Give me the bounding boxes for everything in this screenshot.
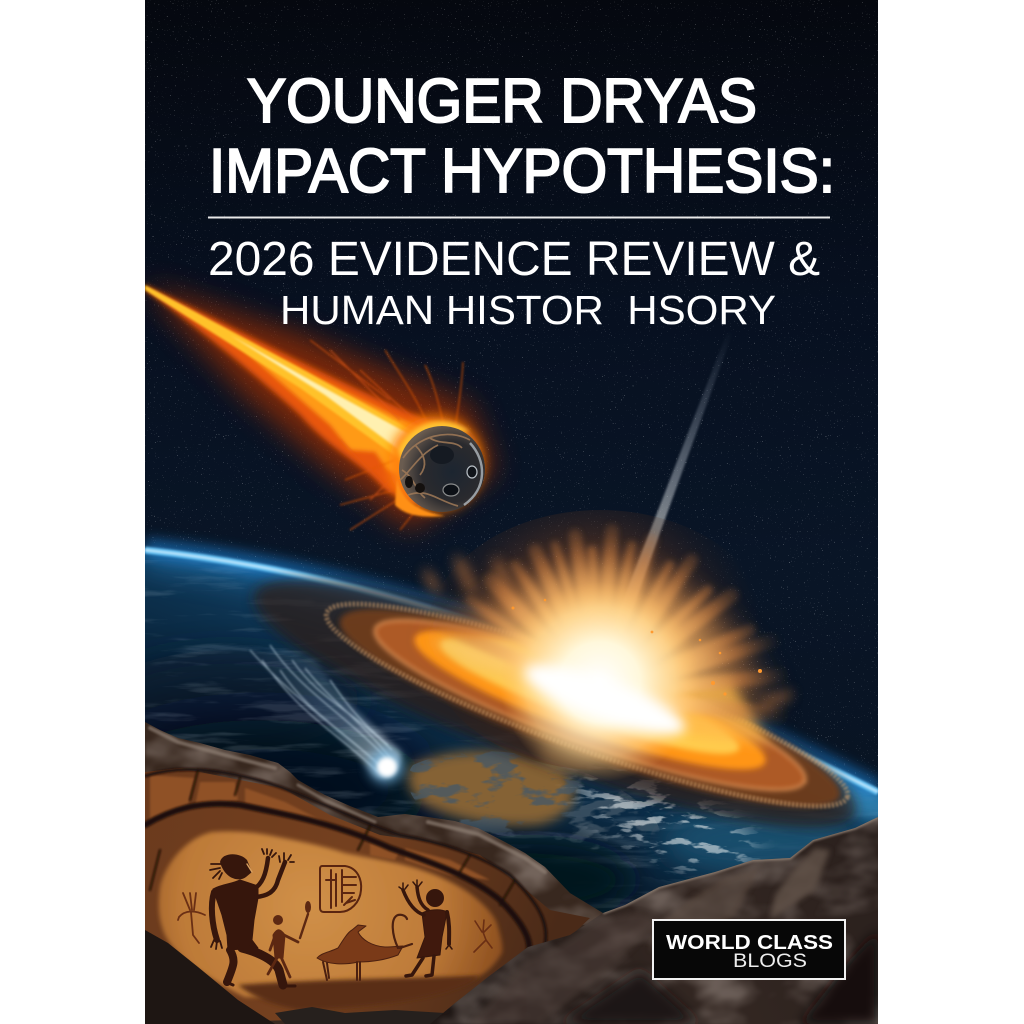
inner speckled ring [370, 616, 810, 794]
left cave rock [145, 715, 615, 1024]
fire disk [411, 628, 769, 773]
left glyph [178, 893, 205, 943]
impact light beam [628, 346, 726, 591]
debris plumes [420, 553, 795, 712]
space background [145, 0, 878, 790]
orange rock patches [150, 775, 490, 880]
meteor rock [399, 426, 485, 512]
title rule [208, 216, 830, 218]
white core [506, 593, 686, 780]
small staff figure [268, 901, 311, 977]
title [208, 67, 835, 333]
cave painting: figures [178, 849, 492, 986]
animal [317, 915, 412, 980]
embers [512, 599, 762, 696]
cave panel [159, 831, 502, 1010]
rock cracks [145, 770, 546, 965]
meteor sparks [310, 340, 463, 530]
explosion rays [440, 530, 785, 715]
earth [145, 548, 878, 910]
atmosphere limb [145, 548, 878, 792]
subtitle line 2: HUMAN HISTOR HSORY [280, 287, 776, 333]
shadow disk [248, 570, 864, 834]
meteor streak [145, 285, 495, 530]
logo line 1: WORLD CLASS [666, 931, 833, 954]
white cloud fields [565, 769, 769, 884]
right glyph [474, 920, 492, 952]
lower left rock [145, 930, 275, 1024]
logo box [653, 920, 845, 979]
bottom rock ledge [275, 1007, 470, 1024]
brown band [337, 606, 844, 810]
subtitle line 1: 2026 EVIDENCE REVIEW & [208, 233, 820, 286]
shield glyph [320, 866, 361, 912]
impact explosion [248, 510, 864, 834]
panel floor [238, 976, 480, 1010]
glow fan [425, 565, 780, 710]
comet fragment [245, 645, 403, 783]
right flame wash [682, 675, 774, 750]
outer speckled ring [322, 600, 852, 810]
star field [145, 0, 878, 800]
smoke haze [436, 510, 746, 768]
left flame wash [432, 634, 522, 672]
title line 2: IMPACT HYPOTHESIS: [209, 137, 835, 206]
large dancing figure [210, 849, 295, 986]
poster [145, 0, 878, 1024]
title line 1: YOUNGER DRYAS [247, 67, 757, 136]
logo line 2: BLOGS [733, 950, 807, 972]
rock highlights [150, 728, 545, 872]
land mass [400, 743, 660, 850]
right figure [399, 880, 452, 976]
right rock [430, 810, 880, 1024]
